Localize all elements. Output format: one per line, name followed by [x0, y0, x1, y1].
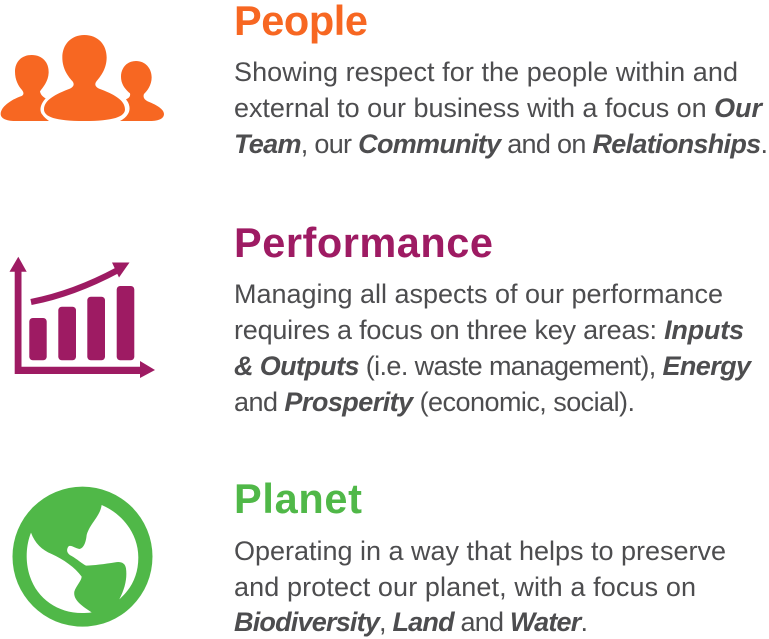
heading: performance: Performance — [234, 219, 493, 266]
text block: people description — [234, 57, 768, 159]
text block: planet description — [234, 536, 726, 637]
text block: planet description: and protect our planet, with a focus on — [234, 572, 696, 602]
icon: globe — [12, 487, 152, 627]
text block: performance description: & Outputs (i.e. waste management), Energy — [234, 351, 753, 381]
text block: performance description: requires a focus on three key areas: Inputs — [234, 315, 744, 345]
chart bars — [29, 286, 134, 360]
panel: performance — [10, 219, 753, 417]
panel: people — [1, 0, 768, 159]
text block: performance description: and Prosperity (economic, social). — [234, 387, 635, 417]
text block: planet description: Operating in a way that helps to preserve — [234, 536, 726, 566]
text block: people description: Showing respect for the people within and — [234, 57, 738, 87]
panel: planet — [12, 475, 726, 637]
text block: performance description: Managing all aspects of our performance — [234, 279, 723, 309]
heading: planet: Planet — [234, 475, 362, 522]
text block: people description: Team, our Community and on Relationships. — [234, 129, 768, 159]
rising trend arrow — [31, 262, 130, 302]
icon: people group — [1, 35, 164, 121]
axes arrows — [10, 257, 155, 378]
icon: bar chart with rising arrow — [10, 257, 155, 378]
text block: people description: external to our business with a focus on Our — [234, 93, 763, 123]
text block: planet description: Biodiversity, Land and Water. — [234, 607, 588, 637]
text block: performance description — [234, 279, 753, 417]
